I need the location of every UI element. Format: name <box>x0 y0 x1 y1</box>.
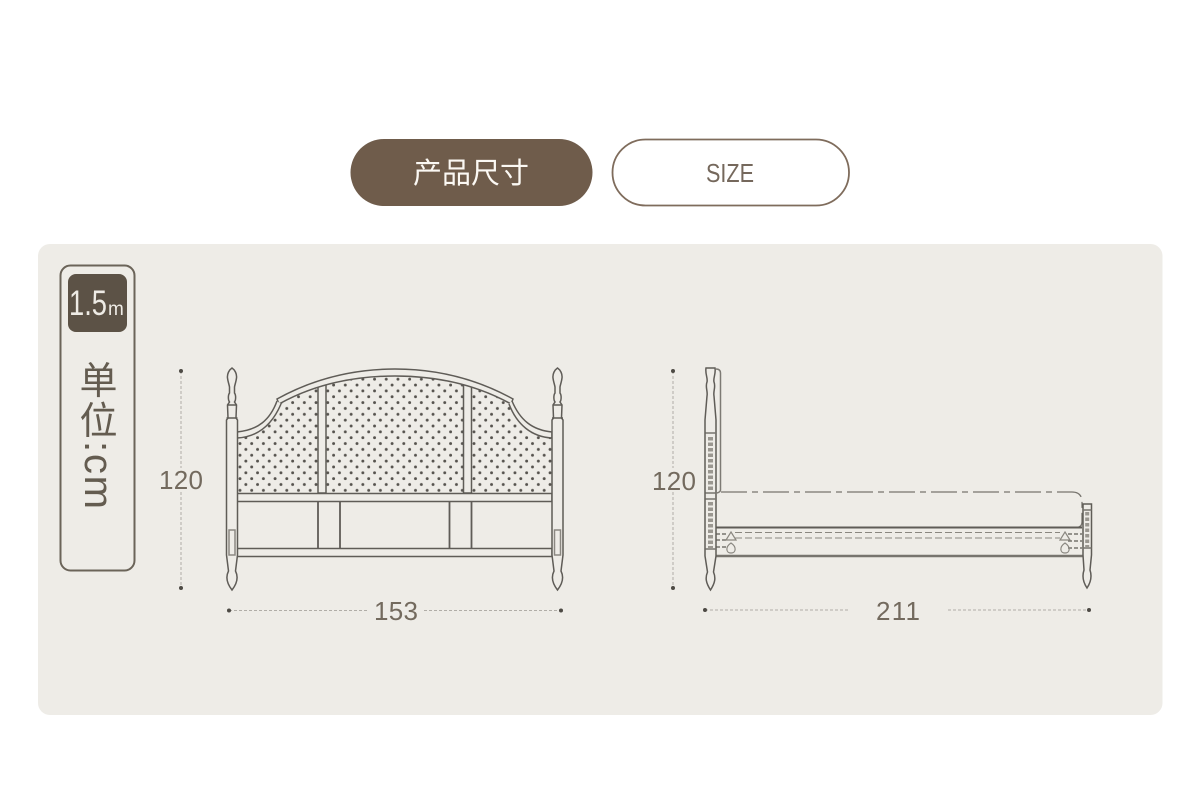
dimension: front width 153 <box>227 596 563 626</box>
dimension: front height 120: 120 <box>159 465 203 495</box>
bottom rail <box>716 555 1083 557</box>
slats <box>735 532 1060 538</box>
dimension: side height 120: 120 <box>652 466 696 496</box>
right post <box>552 368 563 590</box>
foot post <box>1083 504 1092 588</box>
dimension: front width 153: 153 <box>374 596 418 626</box>
head post <box>705 368 716 590</box>
unit badge: :cm <box>76 441 120 509</box>
button: product size: 产品尺寸 <box>413 157 529 190</box>
unit badge: 单 <box>79 361 118 403</box>
panel: dimensions <box>38 244 1162 715</box>
arched top rail <box>277 369 513 404</box>
brackets <box>726 532 736 553</box>
horizontal rails <box>237 494 552 502</box>
left shoulder <box>237 401 281 438</box>
button: SIZE: SIZE <box>706 158 754 188</box>
dimension: side length 211 <box>703 596 1091 626</box>
side view: bed <box>705 368 1092 590</box>
unit badge <box>60 266 134 570</box>
dimension: front height 120 <box>159 369 203 590</box>
vertical rails <box>318 381 326 493</box>
stubs <box>318 502 472 548</box>
right shoulder <box>509 401 552 438</box>
button: product size <box>350 139 592 206</box>
dimension: side height 120 <box>652 369 696 590</box>
mattress <box>716 492 1082 528</box>
button: SIZE <box>612 140 849 206</box>
headboard edge <box>716 369 720 493</box>
left post <box>226 368 238 590</box>
front view: headboard <box>226 368 563 590</box>
unit badge: 位 <box>79 401 118 443</box>
cane panels <box>237 372 552 493</box>
dimension: side length 211: 211 <box>876 596 920 626</box>
unit badge: 1.5 <box>69 284 107 323</box>
unit badge: m <box>108 299 124 320</box>
